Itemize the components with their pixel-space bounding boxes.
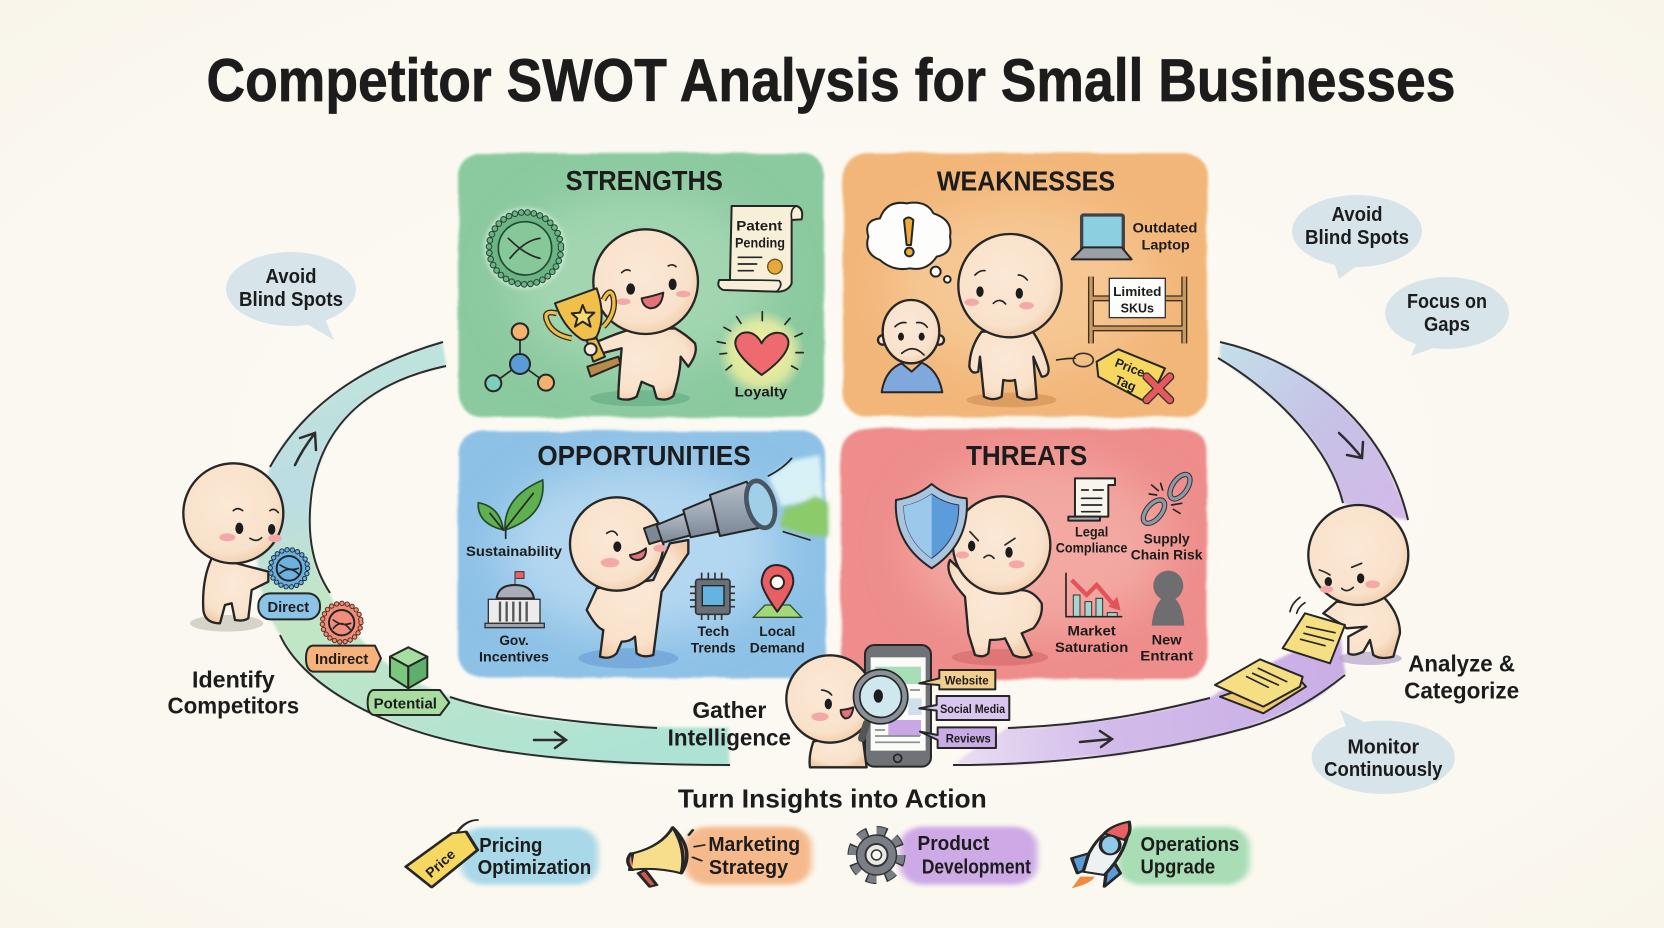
process ribbon: right arc bbox=[1218, 342, 1408, 520]
icon: government building: Incentives bbox=[479, 649, 549, 665]
panel: strengths bbox=[458, 153, 824, 417]
bubble: avoid blind spots right: Blind Spots bbox=[1305, 227, 1409, 249]
icon: worried customer bbox=[878, 300, 944, 392]
heading: strengths: STRENGTHS bbox=[566, 165, 723, 196]
bubble: avoid blind spots left bbox=[226, 252, 356, 340]
label: analyze and categorize: Analyze & bbox=[1408, 651, 1515, 677]
action: product development: Product bbox=[918, 832, 990, 855]
icon: outdated laptop: Laptop bbox=[1141, 236, 1190, 252]
icon: network bbox=[485, 323, 554, 391]
icon: patent scroll: Pending bbox=[735, 234, 785, 250]
action: product development bbox=[853, 827, 1037, 885]
icon: blue seal bbox=[270, 550, 308, 587]
icon: green cube bbox=[390, 647, 427, 688]
bubble: avoid blind spots left: Avoid bbox=[266, 266, 316, 288]
icon: paper in hand bbox=[1283, 597, 1345, 663]
panel: weaknesses bbox=[843, 153, 1207, 417]
icon: orange seal bbox=[322, 603, 361, 642]
icon: location pin bbox=[750, 565, 805, 655]
icon: phone bbox=[865, 645, 931, 767]
icon: green seal bbox=[484, 208, 566, 289]
action: marketing strategy: Marketing bbox=[708, 833, 800, 856]
character: threats bbox=[948, 496, 1050, 666]
bubble: avoid blind spots right bbox=[1292, 195, 1422, 279]
arrow: down right bbox=[1339, 433, 1363, 458]
icon: limited SKUs shelf: SKUs bbox=[1121, 301, 1154, 316]
icon: telescope bbox=[644, 478, 780, 544]
icon: heart loyalty: Loyalty bbox=[735, 384, 788, 400]
icon: heart loyalty bbox=[717, 310, 805, 400]
label: identify competitors bbox=[167, 667, 299, 718]
bubble: monitor continuously: Continuously bbox=[1324, 759, 1442, 781]
label: direct: Direct bbox=[267, 600, 309, 616]
section: turn insights into action bbox=[406, 784, 1250, 888]
icon: thought cloud bbox=[867, 203, 951, 283]
icon: tech chip: Tech bbox=[697, 623, 729, 639]
label: analyze and categorize: Categorize bbox=[1404, 677, 1519, 703]
action: product development: Development bbox=[922, 856, 1031, 878]
label: analyze and categorize bbox=[1404, 651, 1519, 703]
step: identify competitors bbox=[167, 463, 449, 718]
action: operations upgrade: Upgrade bbox=[1141, 856, 1215, 878]
icon: location pin: Local bbox=[759, 623, 795, 639]
step: gather intelligence bbox=[668, 645, 1009, 767]
icon: price tag crossed bbox=[1057, 349, 1170, 403]
action: pricing optimization: Price bbox=[422, 846, 458, 881]
icon: outdated laptop bbox=[1072, 215, 1197, 259]
bubble: avoid blind spots right: Avoid bbox=[1332, 204, 1382, 226]
label: identify competitors: Identify bbox=[192, 667, 275, 693]
bubble: avoid blind spots left: Blind Spots bbox=[239, 289, 343, 311]
character: analyze bbox=[1308, 505, 1408, 665]
bubble: focus on gaps: Focus on bbox=[1407, 291, 1487, 313]
label: website: Website bbox=[945, 673, 989, 687]
label: potential bbox=[368, 690, 449, 715]
icon: tech chip: Trends bbox=[691, 639, 736, 655]
character: opportunities bbox=[570, 497, 688, 668]
heading: threats: THREATS bbox=[966, 440, 1087, 471]
icon: legal document: Compliance bbox=[1056, 540, 1128, 556]
heading: weaknesses: WEAKNESSES bbox=[937, 166, 1115, 197]
label: reviews bbox=[920, 727, 996, 748]
icon: new entrant silhouette: Entrant bbox=[1140, 648, 1193, 664]
icon: magnifier bbox=[857, 673, 905, 738]
icon: telescope view bbox=[768, 455, 828, 540]
icon: legal document bbox=[1056, 478, 1128, 556]
bubble: monitor continuously bbox=[1312, 710, 1455, 794]
icon: trophy bbox=[546, 288, 621, 377]
action: marketing strategy bbox=[628, 827, 812, 887]
label: identify competitors: Competitors bbox=[167, 692, 299, 718]
heading: opportunities: OPPORTUNITIES bbox=[537, 440, 751, 471]
label: indirect: Indirect bbox=[315, 652, 368, 668]
label: gather intelligence: Gather bbox=[692, 697, 766, 723]
icon: location pin: Demand bbox=[750, 639, 805, 655]
arrow: right lower left bbox=[534, 732, 566, 748]
bubble: focus on gaps: Gaps bbox=[1424, 314, 1470, 336]
icon: price tag crossed: Price bbox=[1113, 356, 1147, 380]
bubble: focus on gaps bbox=[1385, 277, 1509, 356]
icon: price tag crossed: Tag bbox=[1113, 373, 1138, 394]
action: operations upgrade bbox=[1072, 822, 1250, 888]
chart: market saturation: Market bbox=[1067, 623, 1116, 639]
icon: patent scroll bbox=[718, 206, 802, 292]
chart: market saturation: Saturation bbox=[1055, 639, 1128, 655]
icon: new entrant silhouette: New bbox=[1152, 631, 1182, 647]
chart: market saturation bbox=[1055, 573, 1128, 655]
icon: tech chip bbox=[690, 573, 736, 655]
label: gather intelligence bbox=[668, 697, 791, 750]
icon: broken chain: Chain Risk bbox=[1131, 546, 1203, 562]
process ribbon: bottom right arc bbox=[953, 625, 1345, 765]
label: website bbox=[919, 670, 995, 689]
action: pricing optimization bbox=[406, 820, 598, 887]
icon: broken chain: Supply bbox=[1144, 530, 1190, 546]
label: social media bbox=[919, 696, 1009, 720]
label: direct bbox=[258, 593, 320, 619]
character: gather bbox=[786, 655, 874, 767]
icon: new entrant silhouette bbox=[1140, 571, 1193, 664]
character: identify bbox=[183, 463, 283, 632]
label: gather intelligence: Intelligence bbox=[668, 724, 791, 750]
label: reviews: Reviews bbox=[946, 731, 991, 745]
heading: turn insights into action: Turn Insights into Action bbox=[678, 784, 987, 813]
bubble: monitor continuously: Monitor bbox=[1347, 736, 1419, 758]
icon: patent scroll: Patent bbox=[736, 218, 783, 234]
label: social media: Social Media bbox=[940, 702, 1005, 716]
label: indirect bbox=[306, 646, 381, 672]
action: pricing optimization: Pricing bbox=[479, 834, 542, 857]
icon: outdated laptop: Outdated bbox=[1132, 220, 1197, 236]
icon: limited SKUs shelf: Limited bbox=[1113, 284, 1161, 299]
process ribbon: left arc bbox=[256, 342, 730, 765]
icon: limited SKUs shelf bbox=[1091, 277, 1184, 343]
icon: government building: Gov. bbox=[499, 632, 529, 648]
arrow: up bbox=[295, 433, 316, 465]
action: marketing strategy: Strategy bbox=[709, 856, 789, 879]
icon: shield bbox=[896, 484, 967, 568]
action: pricing optimization: Optimization bbox=[478, 856, 591, 879]
icon: broken chain bbox=[1131, 471, 1203, 562]
icon: paper stack bbox=[1215, 659, 1306, 713]
action: operations upgrade: Operations bbox=[1141, 833, 1239, 856]
icon: leaf sustainability: Sustainability bbox=[466, 543, 562, 559]
icon: government building bbox=[479, 572, 549, 665]
arrow: right lower right bbox=[1080, 731, 1112, 747]
step: analyze and categorize bbox=[1215, 505, 1519, 794]
panel: threats bbox=[841, 429, 1207, 679]
label: potential: Potential bbox=[374, 696, 437, 712]
panel: opportunities bbox=[458, 431, 828, 678]
character: strengths bbox=[588, 229, 698, 406]
icon: legal document: Legal bbox=[1075, 524, 1108, 540]
icon: leaf sustainability bbox=[466, 480, 562, 559]
character: weaknesses bbox=[958, 234, 1062, 407]
title: Competitor SWOT Analysis for Small Businesses bbox=[206, 47, 1456, 114]
